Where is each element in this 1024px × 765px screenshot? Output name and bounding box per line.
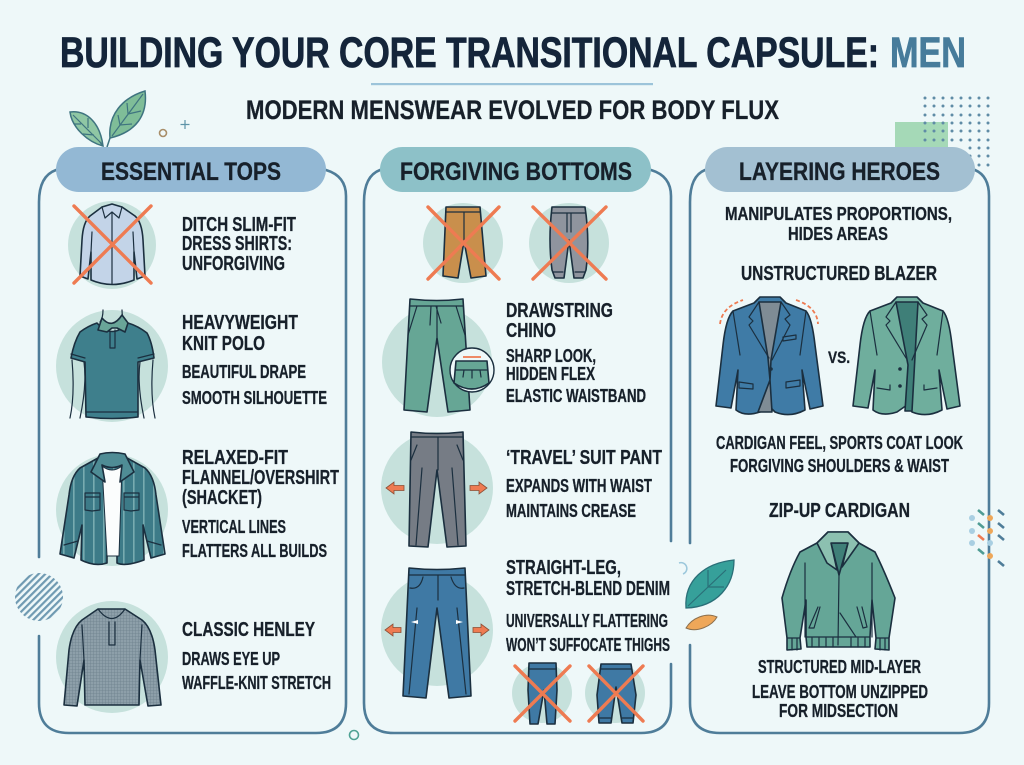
item: straight-leg stretch denim: WON’T SUFFOCATE THIGHS: [506, 635, 670, 655]
item: ditch slim-fit shirt: [68, 201, 296, 289]
label: vs: VS.: [828, 348, 850, 367]
item: heavyweight knit polo: KNIT POLO: [182, 333, 265, 355]
item: classic henley: WAFFLE-KNIT STRETCH: [182, 673, 331, 693]
title: MEN: [890, 29, 966, 77]
item: crossed-out khaki trousers: [423, 203, 503, 283]
decoration: dot grid: [924, 96, 990, 166]
decoration: hatched circle: [15, 573, 63, 621]
item: ditch slim-fit shirt: UNFORGIVING: [182, 253, 285, 275]
item: ditch slim-fit shirt: DRESS SHIRTS:: [182, 233, 292, 255]
cardigan description: LEAVE BOTTOM UNZIPPED: [752, 682, 928, 702]
item: travel suit pant: EXPANDS WITH WAIST: [506, 476, 652, 496]
item: drawstring chino: HIDDEN FLEX: [506, 364, 595, 384]
pill heading: layering heroes: LAYERING HEROES: [739, 158, 940, 186]
item: relaxed-fit flannel overshirt: FLANNEL/OVERSHIRT: [182, 467, 339, 489]
item: relaxed-fit flannel overshirt: VERTICAL LINES: [182, 517, 286, 537]
item: drawstring chino: SHARP LOOK,: [506, 346, 596, 366]
intro text: [725, 204, 952, 244]
item: relaxed-fit flannel overshirt: [56, 447, 339, 566]
decoration: coloured confetti dots: [969, 510, 1004, 566]
pill heading: forgiving bottoms: [380, 147, 651, 192]
item: travel suit pant: [381, 432, 662, 547]
panel outline: [364, 170, 671, 733]
intro text: HIDES AREAS: [788, 224, 888, 244]
pill heading: layering heroes: [705, 147, 975, 192]
decoration: small green ring: [350, 730, 358, 740]
heading: unstructured blazer: UNSTRUCTURED BLAZER: [741, 263, 937, 285]
panel: layering heroes: [690, 147, 989, 733]
decoration: green square: [895, 122, 948, 152]
intro text: MANIPULATES PROPORTIONS,: [725, 204, 952, 224]
item: ditch slim-fit shirt: DITCH SLIM-FIT: [182, 214, 296, 236]
cardigan description: [752, 657, 928, 721]
item: drawstring chino: DRAWSTRING: [506, 300, 613, 322]
item: classic henley: CLASSIC HENLEY: [182, 619, 315, 641]
item: relaxed-fit flannel overshirt: FLATTERS ALL BUILDS: [182, 541, 327, 561]
item: drawstring chino: ELASTIC WAISTBAND: [506, 386, 646, 406]
item: classic henley: [56, 601, 331, 713]
icon: unstructured green blazer: [853, 297, 960, 415]
heading: zip-up cardigan: ZIP-UP CARDIGAN: [769, 500, 910, 522]
cardigan description: STRUCTURED MID-LAYER: [758, 657, 921, 677]
item: heavyweight knit polo: [56, 310, 327, 422]
item: straight-leg stretch denim: STRAIGHT-LEG,: [506, 557, 621, 579]
item: crossed-out grey joggers: [529, 203, 609, 283]
blazer description: [716, 433, 963, 476]
item: straight-leg stretch denim: [381, 557, 670, 698]
item: travel suit pant: ‘TRAVEL’ SUIT PANT: [506, 447, 662, 469]
item: drawstring chino: [382, 299, 646, 417]
pill heading: essential tops: ESSENTIAL TOPS: [101, 158, 281, 186]
item: heavyweight knit polo: SMOOTH SILHOUETTE: [182, 388, 327, 408]
blazer description: FORGIVING SHOULDERS & WAIST: [730, 456, 949, 476]
arrows: stretch: [386, 482, 487, 494]
decoration: top-left leaves: [70, 91, 145, 147]
item: drawstring chino: CHINO: [506, 320, 556, 342]
item: relaxed-fit flannel overshirt: RELAXED-FIT: [182, 447, 288, 469]
item: travel suit pant: MAINTAINS CREASE: [506, 501, 636, 521]
item: heavyweight knit polo: BEAUTIFUL DRAPE: [182, 362, 306, 382]
icon: zip-up cardigan: [782, 532, 895, 650]
item: relaxed-fit flannel overshirt: (SHACKET): [182, 487, 262, 509]
icon: structured blue blazer: [716, 297, 823, 415]
item: crossed-out skinny jeans: [512, 663, 572, 724]
cardigan description: FOR MIDSECTION: [779, 701, 898, 721]
item: classic henley: DRAWS EYE UP: [182, 649, 280, 669]
item: heavyweight knit polo: HEAVYWEIGHT: [182, 312, 298, 334]
item: straight-leg stretch denim: STRETCH-BLEND DENIM: [506, 578, 670, 600]
waistband detail inset: [450, 348, 494, 392]
panel outline: [690, 170, 989, 733]
item: crossed-out baggy jeans: [585, 663, 645, 723]
pill heading: essential tops: [56, 147, 326, 192]
pill heading: forgiving bottoms: FORGIVING BOTTOMS: [400, 158, 632, 186]
panel: forgiving bottoms: [364, 147, 671, 733]
decoration: teal and orange leaves: [679, 560, 734, 630]
panel: essential tops: [39, 147, 346, 733]
item: straight-leg stretch denim: UNIVERSALLY FLATTERING: [506, 611, 668, 631]
arrows: stretch: [385, 624, 489, 636]
subtitle: MODERN MENSWEAR EVOLVED FOR BODY FLUX: [246, 95, 779, 125]
decoration: ring and plus: [160, 120, 190, 136]
panel outline: [39, 170, 346, 733]
